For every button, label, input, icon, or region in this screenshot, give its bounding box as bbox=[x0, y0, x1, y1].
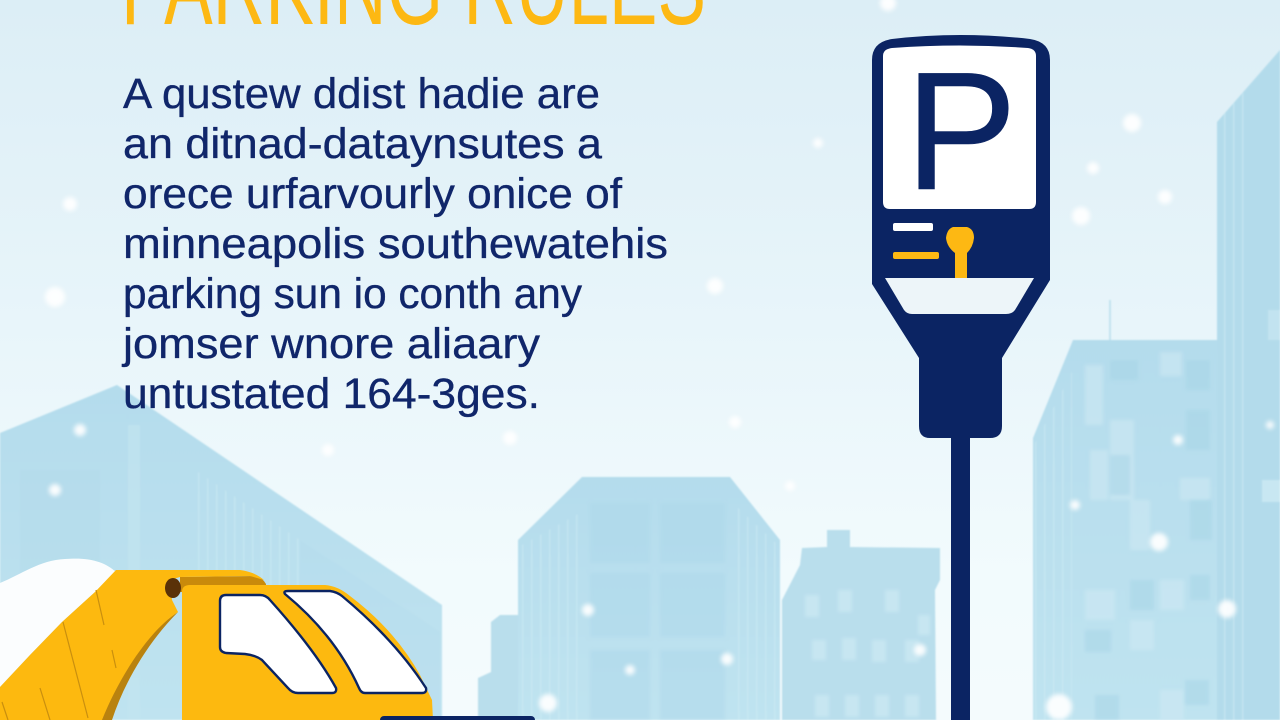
body paragraph: untustated 164-3ges. bbox=[123, 370, 540, 418]
body paragraph: minneapolis southewatehis bbox=[123, 220, 668, 268]
body paragraph: an ditnad-dataynsutes a bbox=[123, 120, 602, 168]
hinge bbox=[165, 578, 181, 598]
body paragraph bbox=[121, 70, 668, 418]
navy hood panel bbox=[380, 716, 535, 720]
building: centre tower bbox=[518, 477, 780, 720]
illustration: yellow snow plow truck bbox=[0, 559, 535, 720]
body paragraph: parking sun io conth any bbox=[123, 270, 582, 318]
building: right tower with spire bbox=[1033, 300, 1220, 720]
plow arm top bar bbox=[180, 576, 266, 592]
cab rear window bbox=[220, 595, 336, 693]
meter body bbox=[872, 35, 1050, 438]
plow arm bbox=[0, 570, 264, 720]
plow ribs bbox=[2, 590, 116, 720]
white indicator bar bbox=[893, 223, 933, 231]
building: small behind centre bbox=[478, 615, 518, 720]
body paragraph: A qustew ddist hadie are bbox=[123, 70, 600, 118]
building: low right of centre bbox=[782, 530, 940, 720]
building: left angled tower bbox=[0, 385, 442, 720]
coin tray bbox=[885, 278, 1034, 314]
snow pile bbox=[0, 559, 116, 687]
meter pole bbox=[951, 430, 970, 720]
plow arm underside bbox=[100, 612, 178, 720]
body paragraph: jomser wnore aliaary bbox=[121, 320, 541, 368]
building: far right tower bbox=[1217, 50, 1280, 720]
meter screen bbox=[883, 46, 1036, 209]
truck cab bbox=[182, 585, 433, 720]
cab front window bbox=[284, 591, 426, 693]
coin slot key bbox=[946, 227, 974, 278]
body paragraph: orece urfarvourly onice of bbox=[123, 170, 623, 218]
icon: parking meter bbox=[872, 35, 1050, 720]
yellow indicator bar bbox=[893, 252, 939, 259]
letter P: P bbox=[905, 37, 1017, 225]
